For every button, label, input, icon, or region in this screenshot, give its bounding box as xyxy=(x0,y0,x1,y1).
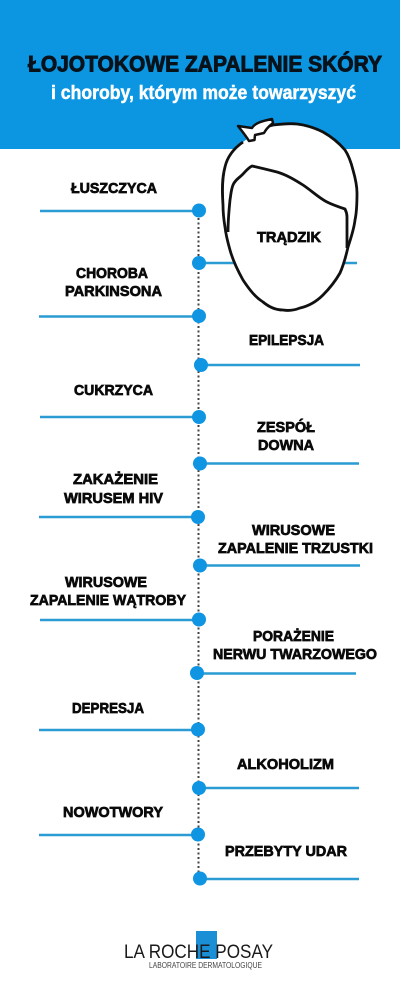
label: Wirusowe zapalenie trzustki: WIRUSOWE xyxy=(252,523,335,539)
condition labels xyxy=(30,181,377,860)
connector lines xyxy=(39,211,360,879)
logo: La Roche-Posay xyxy=(124,931,273,970)
label: Porażenie nerwu twarzowego: PORAŻENIE xyxy=(253,628,334,645)
logo tagline: LABORATOIRE DERMATOLOGIQUE xyxy=(149,961,262,970)
label: Alkoholizm: ALKOHOLIZM xyxy=(237,757,334,773)
subtitle: i choroby, którym może towarzyszyć xyxy=(51,83,356,104)
hairline xyxy=(228,166,347,248)
head outline xyxy=(222,124,357,310)
label: Wirusowe zapalenie wątroby: WIRUSOWE xyxy=(65,575,147,591)
logo blue square xyxy=(196,931,217,959)
label: Zakażenie wirusem HIV: WIRUSEM HIV xyxy=(64,491,163,507)
timeline dotted axis xyxy=(198,218,200,873)
label: Porażenie nerwu twarzowego xyxy=(213,628,377,663)
label: Choroba Parkinsona: PARKINSONA xyxy=(65,284,163,300)
label: Trądzik: TRĄDZIK xyxy=(257,230,322,246)
label: Zespół Downa xyxy=(257,418,315,454)
label: Przebyty udar: PRZEBYTY UDAR xyxy=(225,844,348,860)
label: Zespół Downa: DOWNA xyxy=(258,438,315,454)
timeline dots xyxy=(190,204,208,886)
label: Zakażenie wirusem HIV xyxy=(64,471,163,507)
label: Depresja: DEPRESJA xyxy=(72,701,144,717)
label: Zespół Downa: ZESPÓŁ xyxy=(257,418,315,436)
logo wordmark: LA ROCHE POSAY xyxy=(124,941,273,963)
title: ŁOJOTOKOWE ZAPALENIE SKÓRY xyxy=(28,52,382,76)
label: Choroba Parkinsona xyxy=(65,266,163,300)
label: Łuszczyca: ŁUSZCZYCA xyxy=(71,181,158,197)
label: Epilepsja: EPILEPSJA xyxy=(249,333,324,349)
label: Cukrzyca: CUKRZYCA xyxy=(74,383,154,399)
label: Wirusowe zapalenie wątroby xyxy=(30,575,186,609)
label: Porażenie nerwu twarzowego: NERWU TWARZOWEGO xyxy=(213,647,377,663)
label: Choroba Parkinsona: CHOROBA xyxy=(76,266,149,282)
header band xyxy=(0,0,400,149)
label: Wirusowe zapalenie wątroby: ZAPALENIE WĄTROBY xyxy=(30,593,186,609)
label: Wirusowe zapalenie trzustki xyxy=(218,523,373,557)
label: Zakażenie wirusem HIV: ZAKAŻENIE xyxy=(73,471,158,488)
head illustration xyxy=(222,119,357,310)
label: Nowotwory: NOWOTWORY xyxy=(63,805,163,821)
hair tuft xyxy=(238,119,273,141)
label: Wirusowe zapalenie trzustki: ZAPALENIE TRZUSTKI xyxy=(218,541,373,557)
